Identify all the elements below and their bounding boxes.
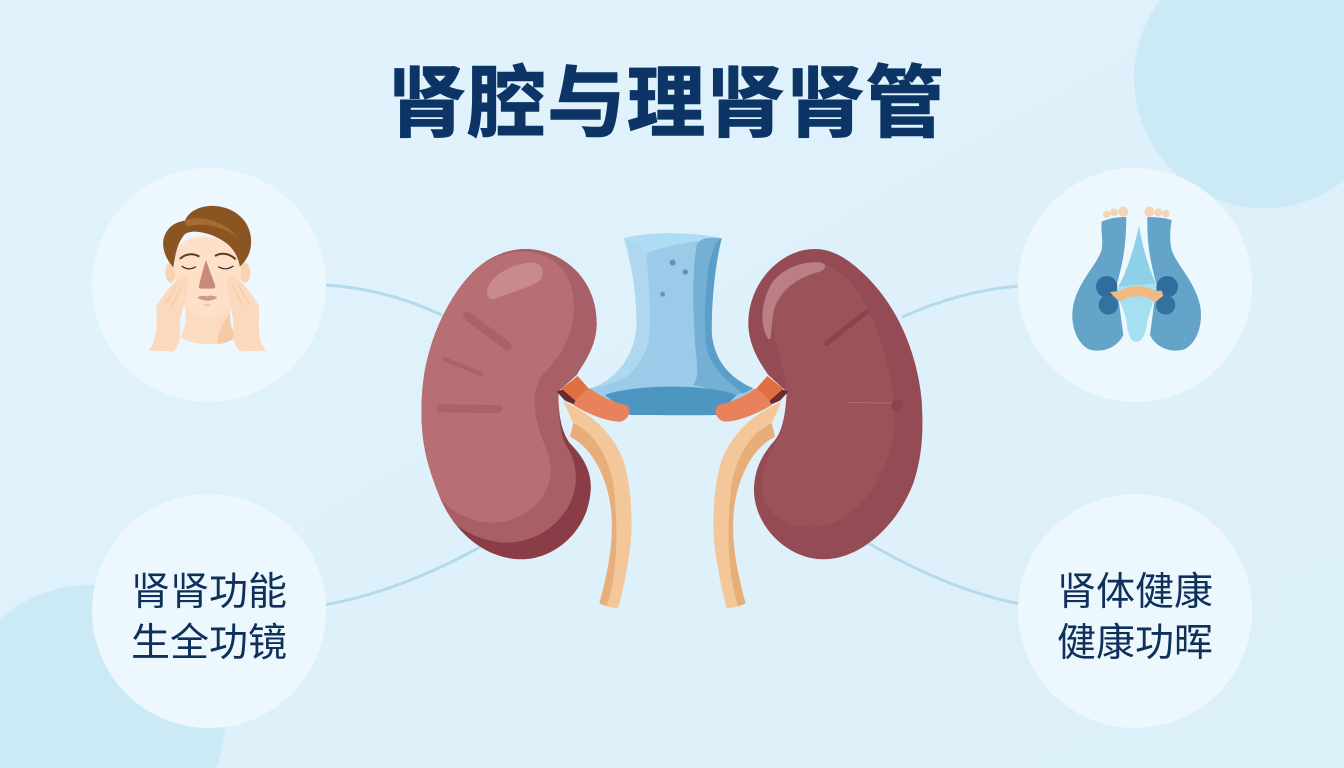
text: body health: 肾体健康 <box>1057 571 1213 614</box>
icon: blue organ <box>1072 207 1201 351</box>
text: kidney function: 生全功镜 <box>131 622 287 665</box>
icon: face with hands <box>148 206 267 351</box>
ureter left <box>563 402 632 608</box>
panel: health text <box>1018 494 1252 728</box>
connector lines <box>324 285 1020 605</box>
title: 肾腔与理肾肾管 <box>388 59 944 147</box>
text: kidney function: 肾肾功能 <box>131 571 287 614</box>
text: body health: 健康功晖 <box>1057 622 1213 665</box>
panel: face massage <box>92 168 326 402</box>
panel: kidney function text <box>92 494 326 728</box>
text: kidney function <box>131 571 287 665</box>
text: body health <box>1057 571 1213 665</box>
bladder <box>590 233 753 415</box>
panel: organ illustration <box>1018 168 1252 402</box>
ureter right <box>713 376 788 608</box>
right kidney <box>713 249 922 608</box>
left kidney <box>422 249 632 608</box>
